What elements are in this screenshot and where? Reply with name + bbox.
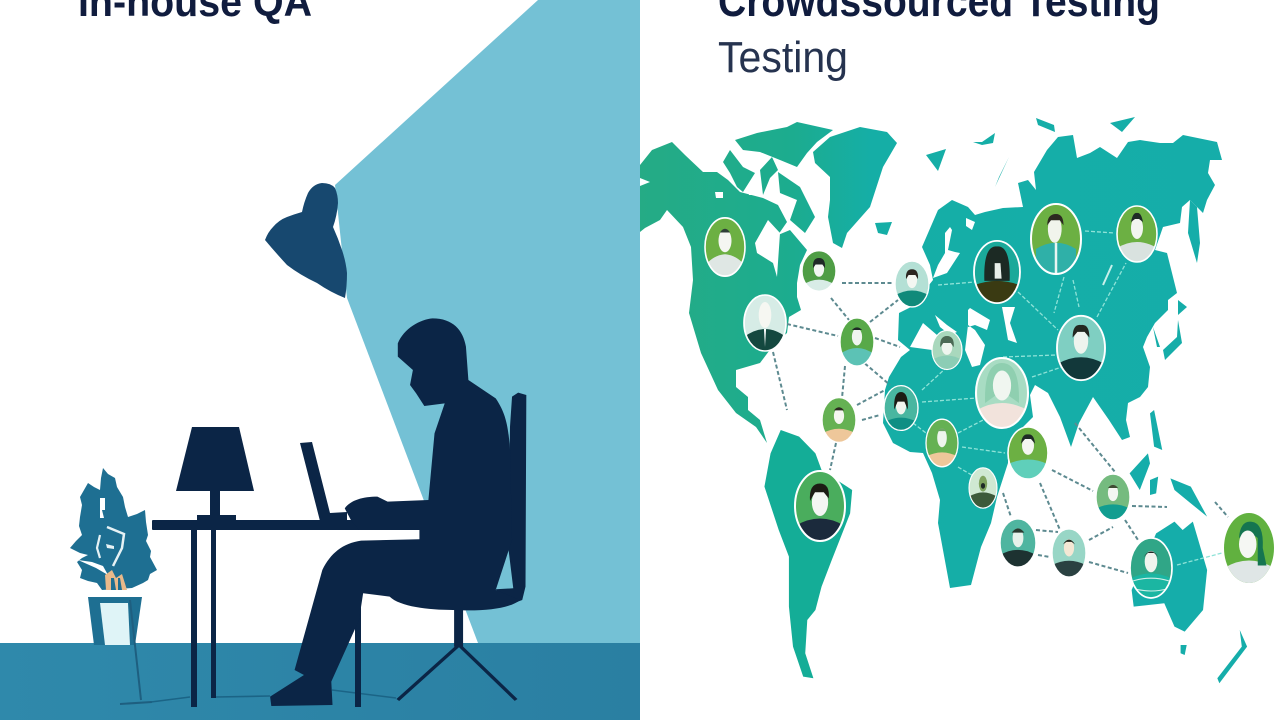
icon: wall lamp — [265, 183, 347, 298]
map land: north atlantic and arctic islands — [875, 117, 1135, 235]
map land: eurasia and africa — [883, 135, 1222, 588]
portrait: tester 22 — [1224, 513, 1274, 583]
map land: greenland — [813, 127, 897, 248]
floor — [0, 643, 640, 720]
map land: japan and sakhalin — [1153, 200, 1200, 360]
portrait: tester 20 — [1052, 529, 1086, 577]
portrait: tester 9 — [1057, 316, 1105, 380]
portrait: tester 16 — [1008, 427, 1048, 479]
portrait: tester 18 — [1096, 474, 1130, 520]
portrait: tester 12 — [884, 386, 918, 430]
floor cables — [151, 690, 396, 702]
map seas — [715, 187, 1017, 367]
panel: in-house QA — [0, 0, 640, 720]
map land: oceania and asian islands — [1130, 410, 1247, 683]
desk — [152, 520, 364, 707]
chair — [398, 393, 526, 700]
icon: laptop — [300, 442, 347, 521]
person silhouette — [270, 318, 520, 706]
portrait: tester 8 — [1117, 206, 1157, 262]
portrait: tester 14 — [926, 419, 958, 467]
portrait: tester 21 — [1130, 538, 1172, 598]
portrait: tester 2 — [802, 251, 836, 291]
portrait: tester 13 — [822, 398, 856, 442]
portrait: tester 17 — [795, 471, 845, 541]
icon: potted plant — [70, 468, 157, 704]
map land: north america — [640, 142, 807, 443]
river highlight in Asia — [1103, 265, 1112, 285]
portrait: tester 4 — [840, 318, 874, 366]
portrait: tester 5 — [895, 261, 929, 307]
portrait: tester 1 — [705, 218, 745, 276]
portrait: tester 19 — [1000, 519, 1036, 567]
connection lines — [773, 231, 1228, 573]
subheading: Testing: Testing — [718, 33, 848, 82]
map land: south america — [764, 430, 852, 678]
light beam — [335, 0, 640, 643]
portrait: tester 11 — [976, 358, 1028, 428]
world map — [640, 117, 1247, 683]
icon: table lamp — [176, 427, 254, 521]
portrait: tester 10 — [932, 330, 962, 370]
portrait: tester 3 — [744, 295, 786, 351]
portrait: tester 6 — [974, 241, 1020, 303]
portrait: tester 7 — [1031, 204, 1081, 274]
portrait: tester 15 — [969, 468, 997, 508]
map land: arctic islands — [723, 122, 833, 233]
tester portraits — [705, 204, 1274, 598]
panel: crowdsourced testing — [640, 0, 1280, 720]
